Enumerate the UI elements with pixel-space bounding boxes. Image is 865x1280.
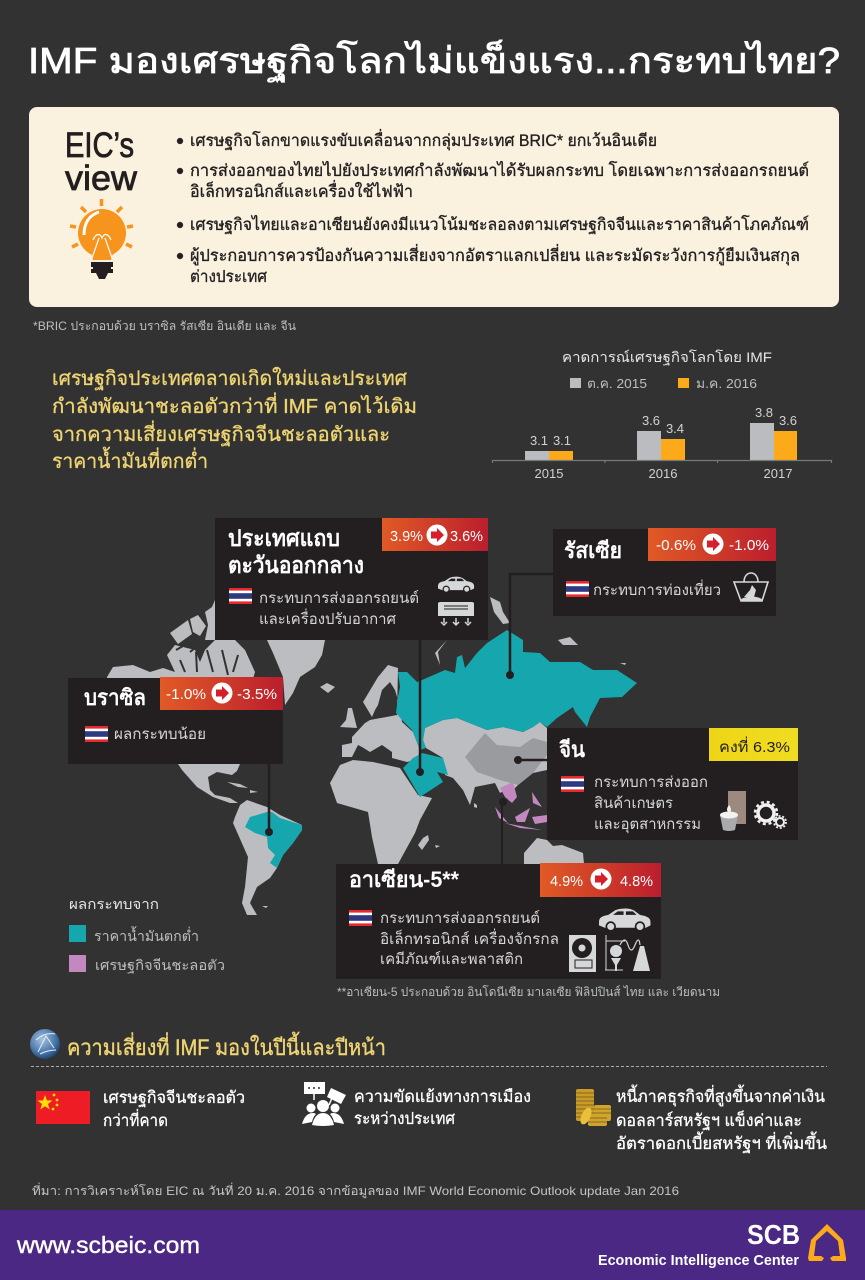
connector: ASEAN <box>499 798 507 864</box>
risk: China slowdown: กว่าที่คาด <box>103 1109 168 1130</box>
bullet list <box>177 129 809 286</box>
chart legend: ม.ค. 2016 <box>696 376 757 391</box>
risk: China slowdown <box>36 1089 245 1130</box>
connector: China <box>514 756 547 764</box>
icon: air conditioner <box>438 602 474 625</box>
data labels: 3.6 <box>642 413 660 428</box>
risk: corporate debt: หนี้ภาคธุรกิจที่สูงขึ้นจากค่าเงิน <box>616 1084 825 1107</box>
data labels: 3.6 <box>779 413 797 428</box>
icon: car <box>599 909 650 932</box>
heading: EIC's view: view <box>65 159 138 198</box>
badge: growth -1.0 to -3.5 <box>160 677 283 710</box>
data labels: 2016 <box>649 466 677 481</box>
badge: growth -0.6 to -1.0: -0.6% <box>656 537 696 554</box>
map: light grey land <box>107 597 626 915</box>
footer: www.scbeic.com <box>16 1232 200 1258</box>
text block: emerging markets summary: เศรษฐกิจประเทศตลาดเกิดใหม่และประเทศ <box>52 367 407 390</box>
icon: travel bag <box>734 573 768 601</box>
badge: growth -0.6 to -1.0 <box>648 528 776 561</box>
panel: China <box>547 728 798 840</box>
bullet list: อิเล็กทรอนิกส์และเครื่องใช้ไฟฟ้า <box>190 180 413 201</box>
bullet list: เศรษฐกิจไทยและอาเซียนยังคงมีแนวโน้มชะลอลงตามเศรษฐกิจจีนและราคาสินค้าโภคภัณฑ์ <box>190 215 809 234</box>
panel: Russia <box>553 528 776 616</box>
icon: lab glassware <box>605 935 650 971</box>
badge: growth 4.9 to 4.8: 4.9% <box>550 873 583 890</box>
source line: ที่มา: การวิเคราะห์โดย EIC ณ วันที่ 20 ม.ค. 2016 จากข้อมูลของ IMF World Economic Outlook update Jan 2016 <box>32 1182 679 1199</box>
chart legend: ต.ค. 2015 <box>587 376 647 391</box>
connector: Russia <box>506 574 553 679</box>
icon: hard disk <box>569 935 596 972</box>
data labels: 2015 <box>535 466 563 481</box>
bar chart: IMF world economic forecast: คาดการณ์เศรษฐกิจโลกโดย IMF <box>562 349 772 366</box>
panel: Middle East: กระทบการส่งออกรถยนต์ <box>259 590 419 607</box>
logo: SCB bodhi leaf <box>808 1224 846 1261</box>
text block: emerging markets summary: กำลังพัฒนาชะลอตัวกว่าที่ IMF คาดไว้เดิม <box>52 392 417 418</box>
panel: Brazil: ผลกระทบน้อย <box>114 726 206 743</box>
icon: gears <box>755 802 786 828</box>
text block: emerging markets summary <box>52 367 417 473</box>
icon: protest crowd <box>302 1082 346 1126</box>
map: teal countries affected by oil price <box>245 630 637 868</box>
data labels: 2017 <box>764 466 792 481</box>
footnote: ASEAN-5: **อาเซียน-5 ประกอบด้วย อินโดนีเซีย มาเลเซีย ฟิลิปปินส์ ไทย และ เวียดนาม <box>337 985 720 999</box>
icon: car <box>438 577 474 593</box>
icon: rubber sheet and latex cup <box>720 791 746 831</box>
icon: China flag <box>36 1091 90 1124</box>
section: IMF risks <box>30 1029 827 1153</box>
panel: ASEAN-5 <box>336 863 661 979</box>
icon: light bulb <box>70 199 133 279</box>
connector: Middle East <box>416 640 424 776</box>
bullet list: ต่างประเทศ <box>190 268 267 286</box>
data labels: 3.4 <box>666 421 684 436</box>
risk: corporate debt <box>576 1084 827 1153</box>
panel: Russia: กระทบการท่องเที่ยว <box>593 579 721 599</box>
map: dark gaps in Canada <box>176 640 238 675</box>
badge: growth -0.6 to -1.0: -1.0% <box>729 537 769 554</box>
panel: ASEAN-5: กระทบการส่งออกรถยนต์ <box>380 910 540 927</box>
title: IMF มองเศรษฐกิจโลกไม่แข็งแรง...กระทบไทย? <box>28 38 840 83</box>
panel: Russia: รัสเซีย <box>564 538 622 563</box>
world map <box>107 574 637 915</box>
data labels: 3.1 <box>553 433 571 448</box>
panel: Brazil: บราซิล <box>84 685 146 710</box>
panel: Middle East <box>215 518 488 640</box>
badge: stable 6.3 <box>709 728 798 761</box>
map legend: เศรษฐกิจจีนชะลอตัว <box>95 957 225 974</box>
heading: EIC's view: EIC’s <box>65 126 134 165</box>
badge: growth -1.0 to -3.5: -3.5% <box>237 686 277 703</box>
text block: emerging markets summary: ราคาน้ำมันที่ตกต่ำ <box>52 447 208 473</box>
data labels: 3.1 <box>530 433 548 448</box>
panel: Middle East: ตะวันออกกลาง <box>228 552 364 578</box>
section: IMF risks: ความเสี่ยงที่ IMF มองในปีนี้และปีหน้า <box>67 1032 386 1060</box>
panel: ASEAN-5: อาเซียน-5** <box>349 867 459 892</box>
chart legend <box>570 376 757 391</box>
footer <box>0 1210 865 1280</box>
risk: China slowdown: เศรษฐกิจจีนชะลอตัว <box>103 1089 245 1107</box>
panel: Middle East: และเครื่องปรับอากาศ <box>259 608 396 628</box>
panel: ASEAN-5: เคมีภัณฑ์และพลาสติก <box>380 951 523 968</box>
text block: emerging markets summary: จากความเสี่ยงเศรษฐกิจจีนชะลอตัวและ <box>52 420 390 446</box>
risk: political conflict: ความขัดแย้งทางการเมือง <box>354 1088 531 1106</box>
footer: SCB <box>747 1219 800 1250</box>
risk: political conflict <box>302 1082 531 1128</box>
bullet list: เศรษฐกิจโลกขาดแรงขับเคลื่อนจากกลุ่มประเทศ BRIC* ยกเว้นอินเดีย <box>190 129 657 151</box>
panel: China: สินค้าเกษตร <box>594 795 673 812</box>
map legend: ผลกระทบจาก <box>69 896 159 912</box>
bar chart: IMF world economic forecast <box>492 349 832 481</box>
footnote: BRIC: *BRIC ประกอบด้วย บราซิล รัสเซีย อินเดีย และ จีน <box>33 319 296 333</box>
badge: growth 3.9 to 3.6: 3.9% <box>390 528 423 545</box>
map legend <box>69 896 225 974</box>
connector: Brazil <box>265 764 273 836</box>
map: pink ASEAN countries <box>495 782 547 830</box>
data labels <box>530 405 797 481</box>
icon: gold coins <box>576 1089 611 1126</box>
panel: Brazil <box>68 677 283 764</box>
footer: Economic Intelligence Center <box>598 1252 799 1269</box>
bullet list: การส่งออกของไทยไปยังประเทศกำลังพัฒนาได้รับผลกระทบ โดยเฉพาะการส่งออกรถยนต์ <box>190 161 809 180</box>
badge: growth 4.9 to 4.8 <box>540 863 661 897</box>
badge: growth 4.9 to 4.8: 4.8% <box>620 873 653 890</box>
risk: corporate debt: ดอลลาร์สหรัฐฯ แข็งค่าและ <box>616 1110 802 1130</box>
panel: ASEAN-5: อิเล็กทรอนิกส์ เครื่องจักรกล <box>380 928 559 948</box>
badge: growth 3.9 to 3.6 <box>382 518 488 551</box>
panel: Middle East: ประเทศแถบ <box>228 525 340 551</box>
panel: China: จีน <box>559 737 585 762</box>
panel: China: กระทบการส่งออก <box>594 774 708 791</box>
heading: EIC's view <box>65 126 138 198</box>
panel: China: และอุตสาหกรรม <box>594 816 701 834</box>
map: China <box>465 733 547 785</box>
data labels: 3.8 <box>755 405 773 420</box>
panel: EIC's view <box>29 107 839 307</box>
map legend: ราคาน้ำมันตกต่ำ <box>94 926 199 944</box>
badge: growth 3.9 to 3.6: 3.6% <box>450 528 483 545</box>
risk: corporate debt: อัตราดอกเบี้ยสหรัฐฯ ที่เพิ่มขึ้น <box>616 1131 827 1153</box>
risk: political conflict: ระหว่างประเทศ <box>354 1110 455 1128</box>
bullet list: ผู้ประกอบการควรป้องกันความเสี่ยงจากอัตราแลกเปลี่ยน และระมัดระวังการกู้ยืมเงินสกุล <box>190 244 800 266</box>
badge: stable 6.3: คงที่ 6.3% <box>719 736 790 756</box>
icon: globe <box>30 1029 60 1059</box>
badge: growth -1.0 to -3.5: -1.0% <box>166 686 206 703</box>
bars <box>525 423 797 460</box>
